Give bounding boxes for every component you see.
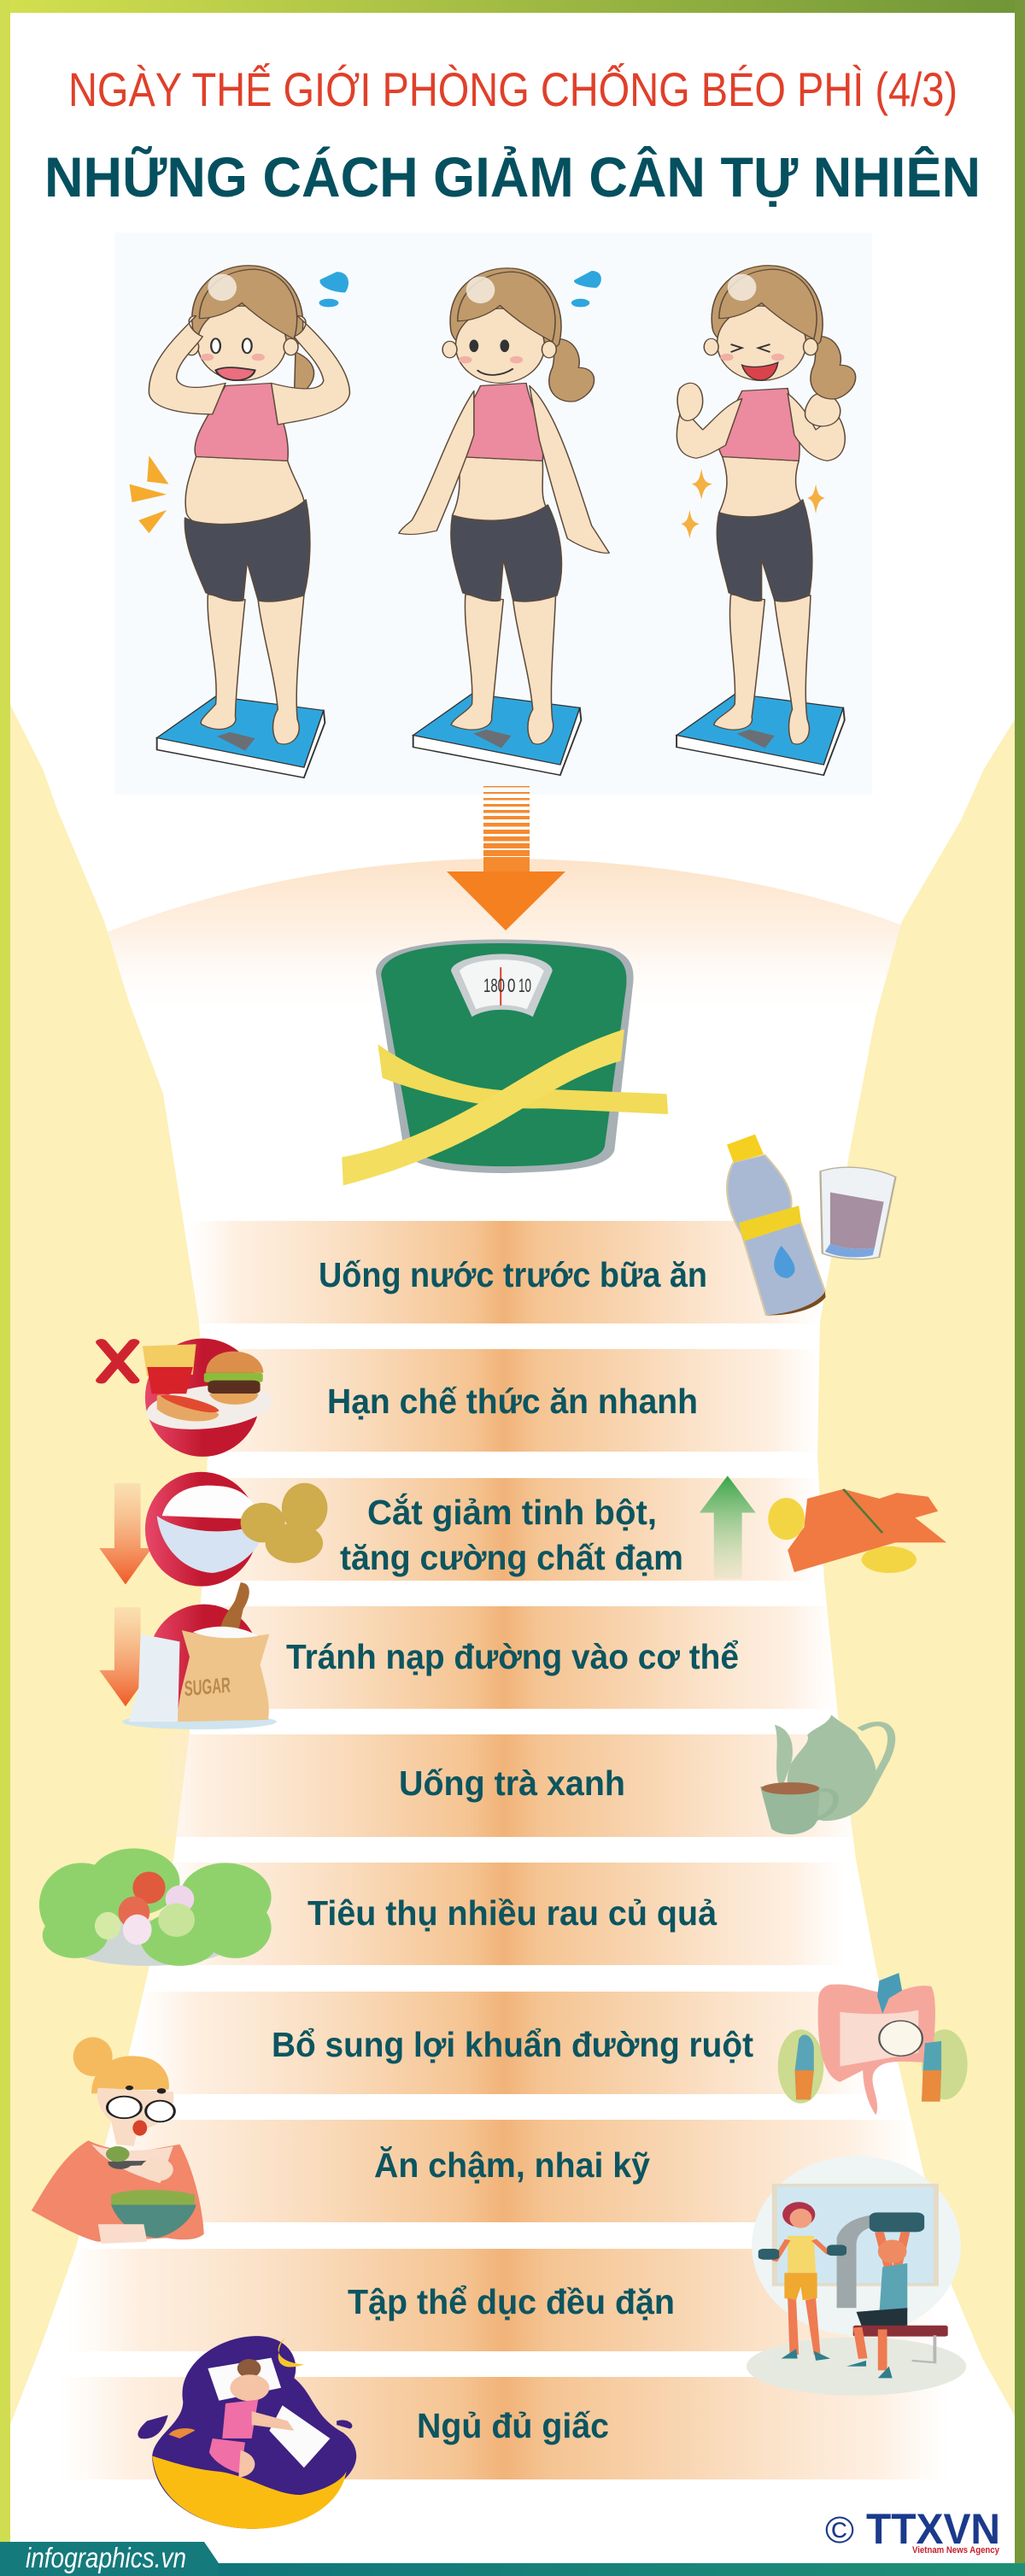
- moon: [278, 2337, 304, 2367]
- spout: [775, 1725, 793, 1791]
- lemons: [768, 1498, 917, 1573]
- agency line: Vietnam News Agency: [912, 2545, 1000, 2555]
- figure 3: slim: [676, 266, 856, 775]
- wordmark: TTXVN: [866, 2505, 1000, 2553]
- bottle: [727, 1135, 826, 1315]
- recommendation bands: [60, 1221, 948, 2479]
- glasses: [108, 2097, 174, 2121]
- eyes and mouth: [126, 2086, 166, 2136]
- magnifier: [879, 2021, 922, 2056]
- scoop: [221, 1582, 249, 1630]
- burger: [204, 1352, 263, 1405]
- pillows: [208, 2358, 330, 2467]
- bowl: [62, 1920, 232, 1966]
- collar: [91, 2145, 173, 2183]
- sugar label: SUGAR: [184, 1673, 231, 1701]
- plate: [122, 1714, 277, 1729]
- salmon: [788, 1489, 946, 1572]
- down arrow: [99, 1483, 152, 1584]
- purple blob: [152, 2336, 356, 2529]
- handle: [859, 1724, 892, 1791]
- list items: [272, 1255, 753, 2445]
- item 10: Ngủ đủ giấc: [417, 2406, 609, 2445]
- face: [97, 2088, 173, 2146]
- yellow side panel left: [0, 696, 208, 2435]
- item 6: Tiêu thụ nhiều rau củ quả: [308, 1893, 718, 1933]
- blanket: [152, 2456, 347, 2529]
- rosemary: [843, 1489, 882, 1533]
- icon: sugar: [99, 1582, 277, 1729]
- plate: [138, 1377, 280, 1436]
- dial: [451, 954, 553, 1017]
- dial numbers: 0: [507, 976, 515, 997]
- site name: infographics.vn: [26, 2542, 186, 2573]
- main heading: NHỮNG CÁCH GIẢM CÂN TỰ NHIÊN: [44, 145, 981, 208]
- arrow stripes: [483, 786, 530, 871]
- footer bar: [0, 2542, 1025, 2576]
- item 5: Uống trà xanh: [399, 1763, 625, 1803]
- hot dog: [157, 1394, 219, 1421]
- people: [795, 1973, 941, 2102]
- fries: [143, 1344, 196, 1394]
- scale body: [376, 940, 634, 1173]
- item 3 line 1: Cắt giảm tinh bột,: [367, 1493, 657, 1532]
- weighing scale with measuring tape: [342, 940, 668, 1185]
- icon: fast food: [102, 1339, 280, 1457]
- red circle: [145, 1472, 258, 1587]
- figures on scales: [130, 266, 856, 777]
- yellow side panel right: [817, 696, 1025, 2435]
- figure 1: overweight: [130, 266, 349, 777]
- peach hump behind scale: [60, 859, 965, 1017]
- red circle: [145, 1339, 261, 1457]
- item 7: Bổ sung lợi khuẩn đường ruột: [272, 2025, 753, 2064]
- lettuce: [39, 1848, 272, 1966]
- tape: [378, 1044, 668, 1114]
- intestine: [818, 1984, 935, 2115]
- sugar cubes glass: [129, 1634, 179, 1722]
- cross mark: [102, 1342, 134, 1381]
- spoon and hand: [106, 2146, 173, 2181]
- machine: [837, 2214, 895, 2308]
- icon: green tea pot: [760, 1715, 892, 1834]
- icon: salmon with green arrow: [700, 1476, 946, 1579]
- icon: water bottle and glass: [727, 1135, 895, 1315]
- blobs and mask: [138, 2415, 352, 2438]
- figure 2: average: [399, 268, 609, 775]
- faint illustration backdrop: [114, 232, 872, 795]
- dial numbers: 180: [483, 976, 505, 997]
- icon: gut microbiome: [778, 1973, 968, 2115]
- copyright mark: ©: [825, 2509, 854, 2551]
- logo TTXVN: [825, 2505, 1000, 2555]
- man on bench: [846, 2213, 948, 2378]
- up arrow: [700, 1476, 756, 1579]
- item 8: Ăn chậm, nhai kỹ: [374, 2145, 650, 2185]
- cup: [760, 1782, 836, 1834]
- bowl of rice: [157, 1486, 266, 1573]
- item 3 line 2: tăng cường chất đạm: [340, 1538, 683, 1577]
- red circle: [149, 1605, 260, 1717]
- item 4: Tránh nạp đường vào cơ thể: [286, 1637, 739, 1676]
- sack: [178, 1630, 269, 1722]
- bushes: [778, 2029, 968, 2104]
- backdrop circle: [752, 2156, 961, 2335]
- pot body: [788, 1715, 876, 1821]
- item 9: Tập thể dục đều đặn: [348, 2282, 675, 2321]
- orange arrow: [447, 786, 565, 930]
- icon: gym: [747, 2156, 966, 2396]
- arrow head: [447, 871, 565, 930]
- potatoes: [241, 1483, 327, 1563]
- icon: salad: [39, 1848, 272, 1966]
- dial numbers: [483, 976, 531, 997]
- window: [775, 2186, 936, 2285]
- icon: woman eating: [32, 2037, 204, 2244]
- dial numbers: 10: [518, 976, 531, 997]
- item 1: Uống nước trước bữa ăn: [319, 1255, 707, 1294]
- icon: rice and potatoes: [99, 1472, 327, 1587]
- glass: [820, 1167, 895, 1259]
- item 2: Hạn chế thức ăn nhanh: [327, 1382, 698, 1421]
- title: [44, 62, 981, 208]
- bowl of salad: [98, 2190, 196, 2244]
- icon: sleep: [138, 2336, 356, 2529]
- body: [32, 2140, 204, 2242]
- sleeping woman: [209, 2359, 294, 2478]
- hair: [73, 2037, 169, 2093]
- down arrow: [99, 1607, 152, 1706]
- vegetables: [95, 1872, 195, 1945]
- floor: [747, 2337, 966, 2396]
- woman with dumbbells: [758, 2202, 846, 2361]
